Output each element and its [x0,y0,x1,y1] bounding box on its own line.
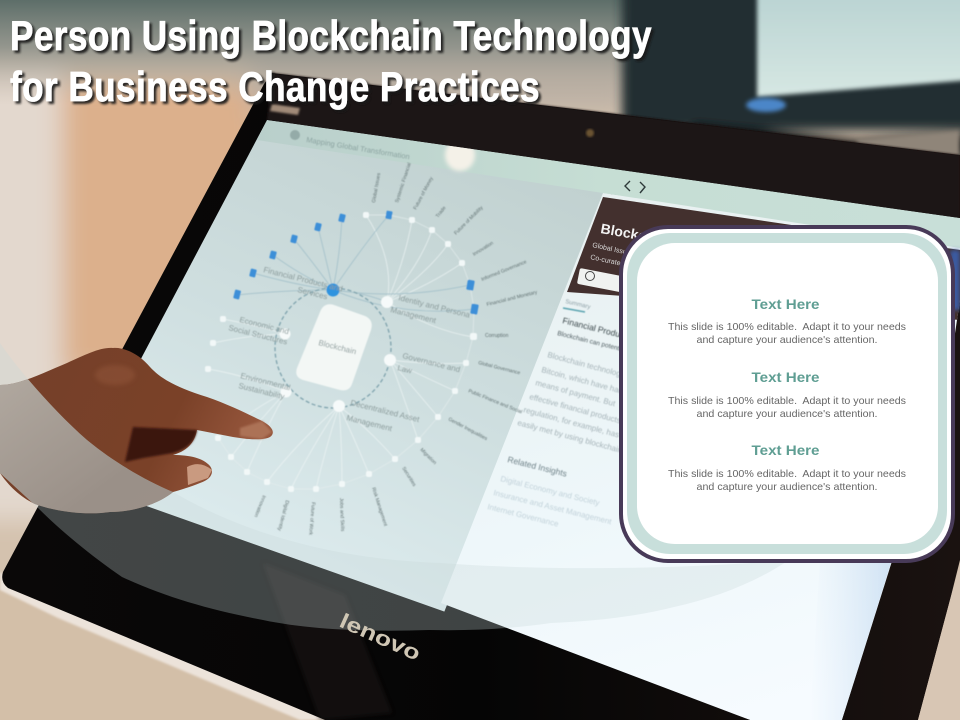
category labels: Management [390,305,438,325]
right panel blurred text: Financial Products [562,315,632,342]
right panel blurred text: Blockchain can potentially [557,330,632,355]
right panel blurred text: easily met by using blockchain [516,418,623,455]
card teal band [627,233,947,554]
bezel logo mark [270,104,300,115]
blue connection lines [237,215,474,311]
gap between fingers [125,427,197,462]
category labels: Sustainability [238,381,285,401]
outer topic labels: Public Finance and Social [467,388,523,415]
title [10,12,652,110]
light glare [445,139,475,171]
centre card: Blockchain [296,304,372,390]
outer topic labels: Future of Mobility [453,205,485,236]
swoosh crescent [0,343,792,631]
category labels [228,265,471,433]
header text: Global Issue [592,242,631,257]
text block 1: Text Here [752,297,820,312]
navigation arrows [625,181,645,193]
outer topic labels: Innovation [472,240,495,258]
category labels: Decentralized Asset [350,398,421,424]
right panel blurred text: regulation, for example, has [522,405,620,439]
right wall corner [918,565,960,720]
text block 1: This slide is 100% editable. Adapt it to your needs [668,322,906,333]
outer topic labels: Corruption [485,333,509,339]
outer topic labels: Future of Work [307,502,316,536]
card inner panel [637,243,938,544]
category labels: Social Structures [228,323,288,347]
category labels: Identity and Persona [398,293,471,320]
knuckle highlight [95,365,135,385]
title: Person Using Blockchain Technology [10,12,652,59]
panel: text card [621,227,953,561]
right panel blurred text: Blockchain technology [546,350,626,380]
hand pointing at the screen [0,348,273,513]
header text: Co-curated [590,254,625,268]
right panel blurred text: effective financial products [528,392,622,425]
outer topic labels: Systemic Financial [394,162,413,204]
outer topic labels: Migration [419,447,438,466]
tablet screen [60,120,960,720]
outer topic labels: Digital Identity [276,499,290,532]
index fingertip [240,421,272,439]
category labels: Governance and [402,351,461,374]
outer topic labels: Trade [435,205,448,219]
header panel: Blockchain [567,197,960,320]
right panel blurred text: Bitcoin, which have had [540,365,624,396]
outer topic labels: Financial and Monetary [486,289,538,308]
screen left panel [141,120,620,612]
text block 1 [668,297,906,346]
outer topic labels: Gender Inequalities [447,416,489,442]
card outer border [621,227,953,561]
hand silhouette [0,348,273,513]
text block 3: This slide is 100% editable. Adapt it to your needs [668,469,906,480]
translucent swoosh overlay [0,343,792,631]
right panel blurred text: Insurance and Asset Management [493,488,613,527]
small white topic nodes [205,212,477,492]
arm seen through swoosh [0,379,173,514]
outer topic labels [252,162,538,536]
text block 3 [668,443,906,493]
right panel blurred text: Related Insights [507,454,568,479]
thumb nail [187,464,212,485]
text block 2: and capture your audience's attention. [696,409,878,420]
category labels: Law [397,363,413,376]
category labels: Environmental [240,371,292,392]
lenovo logo: lenovo [336,610,424,666]
outer topic labels: Risk Management [370,487,388,528]
outer topic labels: Future of Money [412,176,435,211]
main white nodes [280,296,396,412]
header text: Blockchain [599,220,676,249]
white connection lines [208,215,474,489]
header text [577,224,642,292]
text block 2: This slide is 100% editable. Adapt it to your needs [668,396,906,407]
right panel blurred text: Summary [565,299,591,311]
right panel blurred text: means of payment. But [534,378,617,408]
right panel blurred text [487,299,632,529]
bezel upper tone [267,73,960,260]
category labels: Services [297,285,328,301]
dashed ring [275,288,391,408]
right panel blurred text: Internet Governance [487,502,560,529]
screen top bar [257,120,960,248]
text block 1: and capture your audience's attention. [696,335,878,346]
top bar caption: Mapping Global Transformation [306,135,410,161]
category labels: Economic and [239,315,290,336]
screen right panel [441,193,960,720]
category labels: Financial Products and [263,265,344,294]
outer topic labels: Jobs and Skills [338,498,345,532]
text block 2: Text Here [752,370,820,385]
blue topic squares [233,211,479,315]
outer topic labels: Global Issues [371,172,382,203]
camera lens [586,129,594,137]
blockchain network diagram [205,162,538,536]
outer topic labels: Global Governance [478,360,521,376]
outer topic labels: Securities [400,466,417,488]
table edge at lower left [0,572,340,720]
text block 3: and capture your audience's attention. [696,482,878,493]
outer topic labels: Informed Governance [481,259,528,283]
blue hub [326,284,340,296]
category labels: Management [346,413,394,433]
outer topic labels: Innovation [252,494,267,518]
text block 3: Text Here [752,443,820,458]
screen edge blue tint [950,250,960,310]
centre card: Blockchain: Blockchain [318,338,357,356]
text block 2 [668,370,906,420]
right panel blurred text: Digital Economy and Society [500,474,600,508]
lower right sky-blue glow [832,563,891,720]
bezel reflection [263,563,392,720]
title: for Business Change Practices [10,63,540,110]
